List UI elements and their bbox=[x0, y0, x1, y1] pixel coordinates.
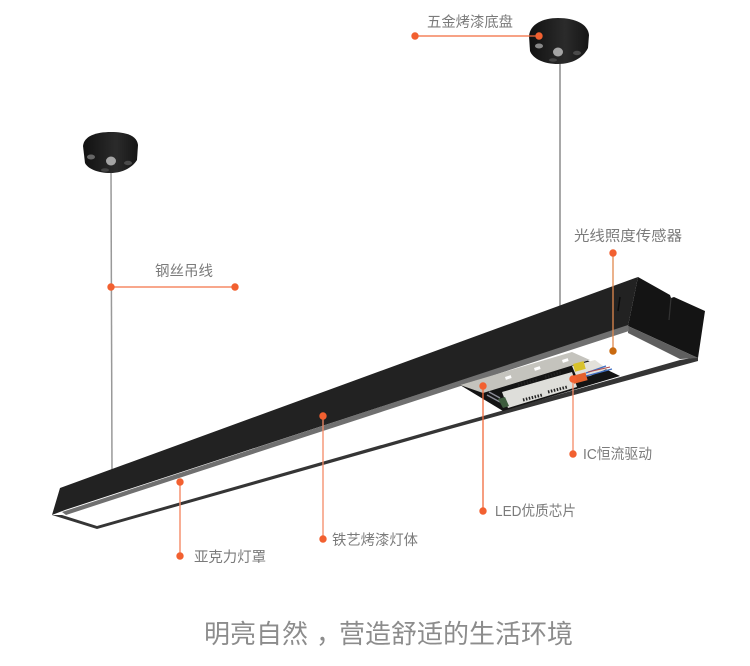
callout: acrylic cover bbox=[176, 478, 266, 566]
icon: right ceiling mount bbox=[529, 18, 589, 306]
callout: light sensor: 光线照度传感器 bbox=[574, 228, 683, 245]
driver wires bbox=[487, 392, 500, 402]
icon: left ceiling mount bbox=[83, 132, 138, 470]
callout: iron body: 铁艺烤漆灯体 bbox=[332, 532, 418, 549]
callout: hardware base: 五金烤漆底盘 bbox=[427, 13, 513, 31]
linear lamp body bbox=[52, 277, 705, 529]
callout: hardware base bbox=[411, 13, 543, 40]
callout: steel wire bbox=[107, 263, 239, 291]
lamp bottom rail bbox=[52, 357, 698, 529]
lamp right rail bbox=[628, 326, 698, 359]
driver box bbox=[502, 372, 577, 408]
callout: steel wire: 钢丝吊线 bbox=[155, 263, 213, 280]
bottom tagline bbox=[204, 619, 573, 649]
callout: IC driver: IC恒流驱动 bbox=[583, 446, 652, 463]
bottom tagline: 明亮自然 bbox=[204, 619, 308, 649]
callout: acrylic cover: 亚克力灯罩 bbox=[194, 549, 266, 566]
circuit board bbox=[498, 397, 509, 408]
callout: LED chip: LED优质芯片 bbox=[495, 503, 576, 520]
lamp grey front edge bbox=[62, 325, 629, 515]
open section with driver bbox=[460, 352, 620, 411]
callout: iron body bbox=[319, 412, 418, 549]
callout: light sensor bbox=[574, 228, 683, 355]
callout: LED chip bbox=[479, 382, 576, 520]
lamp acrylic panel bbox=[62, 331, 682, 525]
lamp end cap bbox=[628, 277, 705, 358]
lamp black side face bbox=[52, 277, 638, 515]
LED strip bbox=[460, 352, 590, 393]
bottom tagline: 营造舒适的生活环境 bbox=[339, 619, 573, 649]
yellow capacitor bbox=[573, 361, 586, 372]
bottom tagline: ， bbox=[316, 619, 342, 649]
connector bbox=[572, 372, 588, 384]
callout: IC driver bbox=[569, 375, 652, 463]
terminal board bbox=[572, 360, 607, 378]
